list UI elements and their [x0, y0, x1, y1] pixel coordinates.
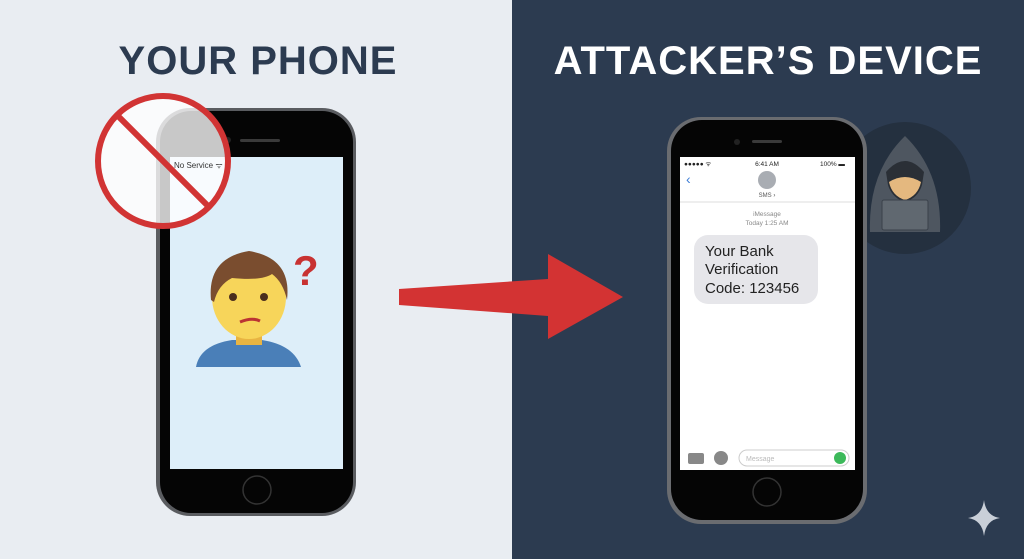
message input bar: [688, 450, 849, 466]
right phone: iMessage: [753, 211, 781, 218]
left phone: [156, 108, 356, 516]
right phone: SMS ›: [759, 193, 775, 199]
icon: no-signal prohibited sign: [98, 96, 228, 226]
message bubble: Code: 123456: [705, 280, 799, 297]
title: your phone: YOUR PHONE: [119, 39, 397, 83]
message bubble: Verification: [705, 261, 778, 278]
icon: confused man: [196, 251, 301, 367]
status text: no service: No Service ᯤ: [174, 161, 223, 170]
message bubble: [694, 235, 818, 304]
right phone: ‹: [686, 171, 691, 187]
icon: question mark: ?: [293, 247, 319, 294]
title: attacker's device: ATTACKER’S DEVICE: [554, 39, 982, 83]
icon: sparkle: [968, 500, 1000, 536]
arrow: [399, 254, 623, 339]
right phone: 6:41 AM: [755, 161, 779, 168]
right phone: [667, 117, 867, 524]
icon: hacker: [839, 122, 971, 254]
right phone: ●●●●● ᯤ: [684, 161, 712, 168]
right phone: Today 1:25 AM: [746, 220, 788, 227]
message bubble: Your Bank: [705, 243, 774, 260]
message input bar: Message: [746, 456, 775, 463]
right phone: 100% ▬: [820, 161, 845, 168]
